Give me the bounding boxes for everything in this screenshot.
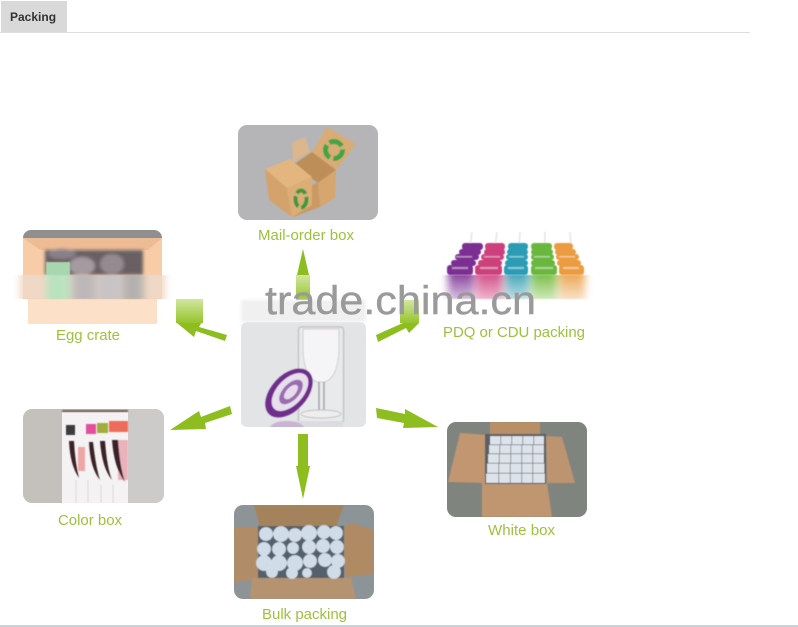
green cups [531, 243, 557, 275]
cup highlights [452, 256, 579, 269]
teal cups [504, 243, 528, 275]
tab: Packing [1, 1, 67, 32]
arrow: up to mail-order box [296, 249, 310, 300]
arrow: to white box [376, 408, 438, 428]
watermark grey band above center photo [241, 300, 366, 322]
panel: PDQ or CDU photo [447, 232, 584, 275]
arrow: to color box [170, 406, 232, 430]
panel: color box photo [23, 409, 164, 503]
label: Egg crate: Egg crate [56, 328, 120, 344]
watermark band over egg crate [20, 275, 165, 299]
arrow: down to bulk packing [296, 434, 310, 499]
tab: Packing: Packing [10, 10, 56, 24]
purple cups [447, 243, 483, 275]
panel: white box photo [447, 422, 587, 517]
panel: egg crate photo [23, 230, 162, 324]
panel: bulk packing photo [234, 505, 374, 599]
straws [468, 232, 572, 262]
arrow: to PDQ [376, 300, 419, 342]
packed cups [256, 525, 345, 579]
pink cups [475, 243, 505, 275]
panel: mail-order box photo [238, 125, 378, 220]
watermark band over PDQ photo [448, 275, 585, 299]
label: Color box: Color box [58, 513, 123, 529]
arrow: to egg crate [176, 299, 227, 341]
label: Bulk packing: Bulk packing [262, 607, 347, 623]
panel: center glass photo [241, 322, 366, 435]
label: White box: White box [488, 523, 556, 539]
watermark: trade.china.cn: trade.china.cn [265, 279, 536, 323]
label: Mail-order box: Mail-order box [258, 228, 355, 244]
white boxes grid [486, 436, 545, 483]
orange cups [554, 243, 584, 275]
label: PDQ or CDU packing: PDQ or CDU packing [443, 325, 585, 341]
